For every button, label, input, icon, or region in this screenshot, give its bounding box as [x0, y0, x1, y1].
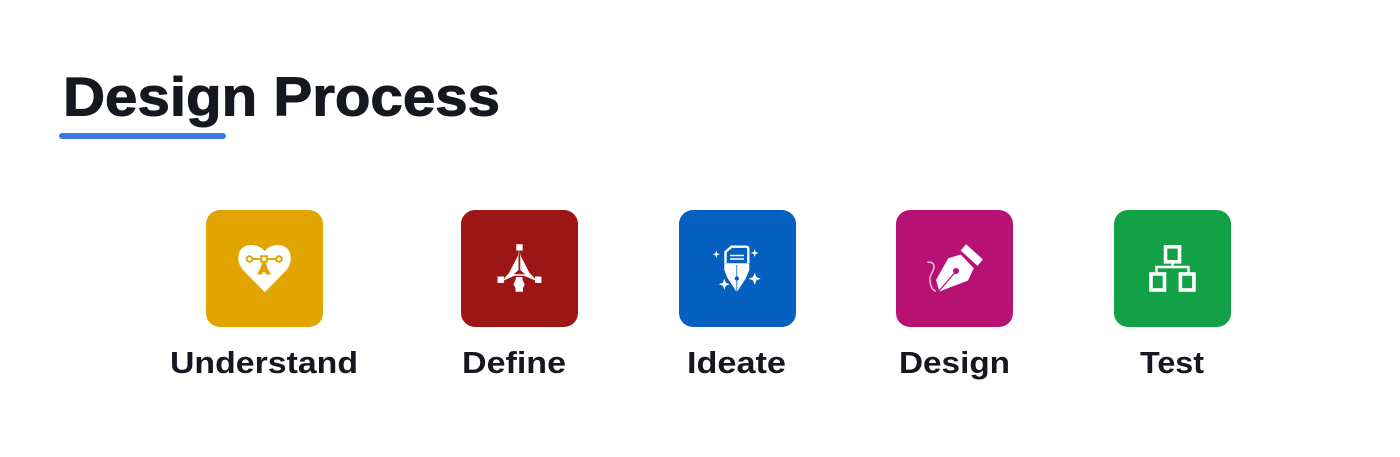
tile: Ideate: [679, 210, 796, 327]
label: Ideate: Ideate: [687, 345, 786, 380]
icon: heart with vector pen: [238, 245, 291, 292]
step: Design: [896, 210, 1013, 380]
tile: Define: [461, 210, 578, 327]
label: Understand: Understand: [170, 345, 358, 380]
step: Understand: [170, 210, 358, 380]
title: Design Process: [63, 66, 500, 128]
icon: fountain pen nib: [927, 245, 982, 292]
step: Define: [461, 210, 578, 380]
label: Test: Test: [1140, 345, 1204, 380]
step: Test: [1114, 210, 1231, 380]
tile: Design: [896, 210, 1013, 327]
title underline: [59, 133, 226, 139]
tile: Understand: [206, 210, 323, 327]
icon: hierarchy boxes: [1151, 247, 1194, 290]
label: Design: Design: [899, 345, 1010, 380]
step: Ideate: [679, 210, 796, 380]
icon: pen tool anchor points: [498, 244, 541, 292]
label: Define: Define: [462, 345, 566, 380]
tile: Test: [1114, 210, 1231, 327]
icon: document nib with sparkles: [712, 247, 761, 292]
